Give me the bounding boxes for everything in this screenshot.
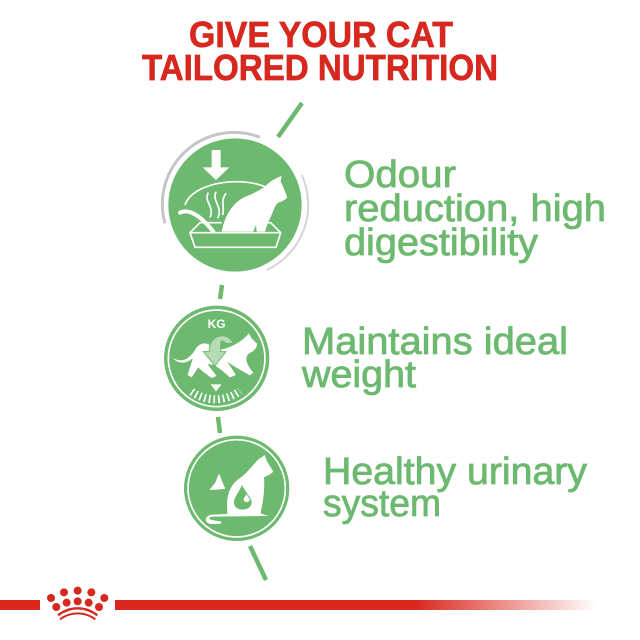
- title: TAILORED NUTRITION: [142, 47, 498, 88]
- connector lines: [218, 103, 302, 580]
- icon: urinary cat: [184, 436, 289, 541]
- footer bar left: [0, 600, 40, 610]
- text: ideal weight: Maintains ideal: [302, 321, 568, 363]
- text: odour reduction: Odour: [344, 154, 456, 196]
- text: urinary system: Healthy urinary: [323, 451, 587, 493]
- footer bar right: [115, 600, 597, 610]
- icon: weight control cat: KG: [208, 317, 226, 331]
- title: GIVE YOUR CAT: [189, 14, 453, 55]
- icon: cat over litter tray: [162, 132, 308, 272]
- text: urinary system: [323, 451, 587, 525]
- text: odour reduction: digestibility: [344, 222, 538, 264]
- text: odour reduction: [344, 154, 606, 264]
- icon: weight control cat: [164, 306, 269, 411]
- logo: crown: [47, 587, 108, 619]
- text: urinary system: system: [323, 483, 441, 525]
- text: odour reduction: reduction, high: [344, 188, 606, 230]
- text: ideal weight: weight: [301, 354, 416, 396]
- title: [142, 14, 498, 88]
- text: ideal weight: [301, 321, 568, 396]
